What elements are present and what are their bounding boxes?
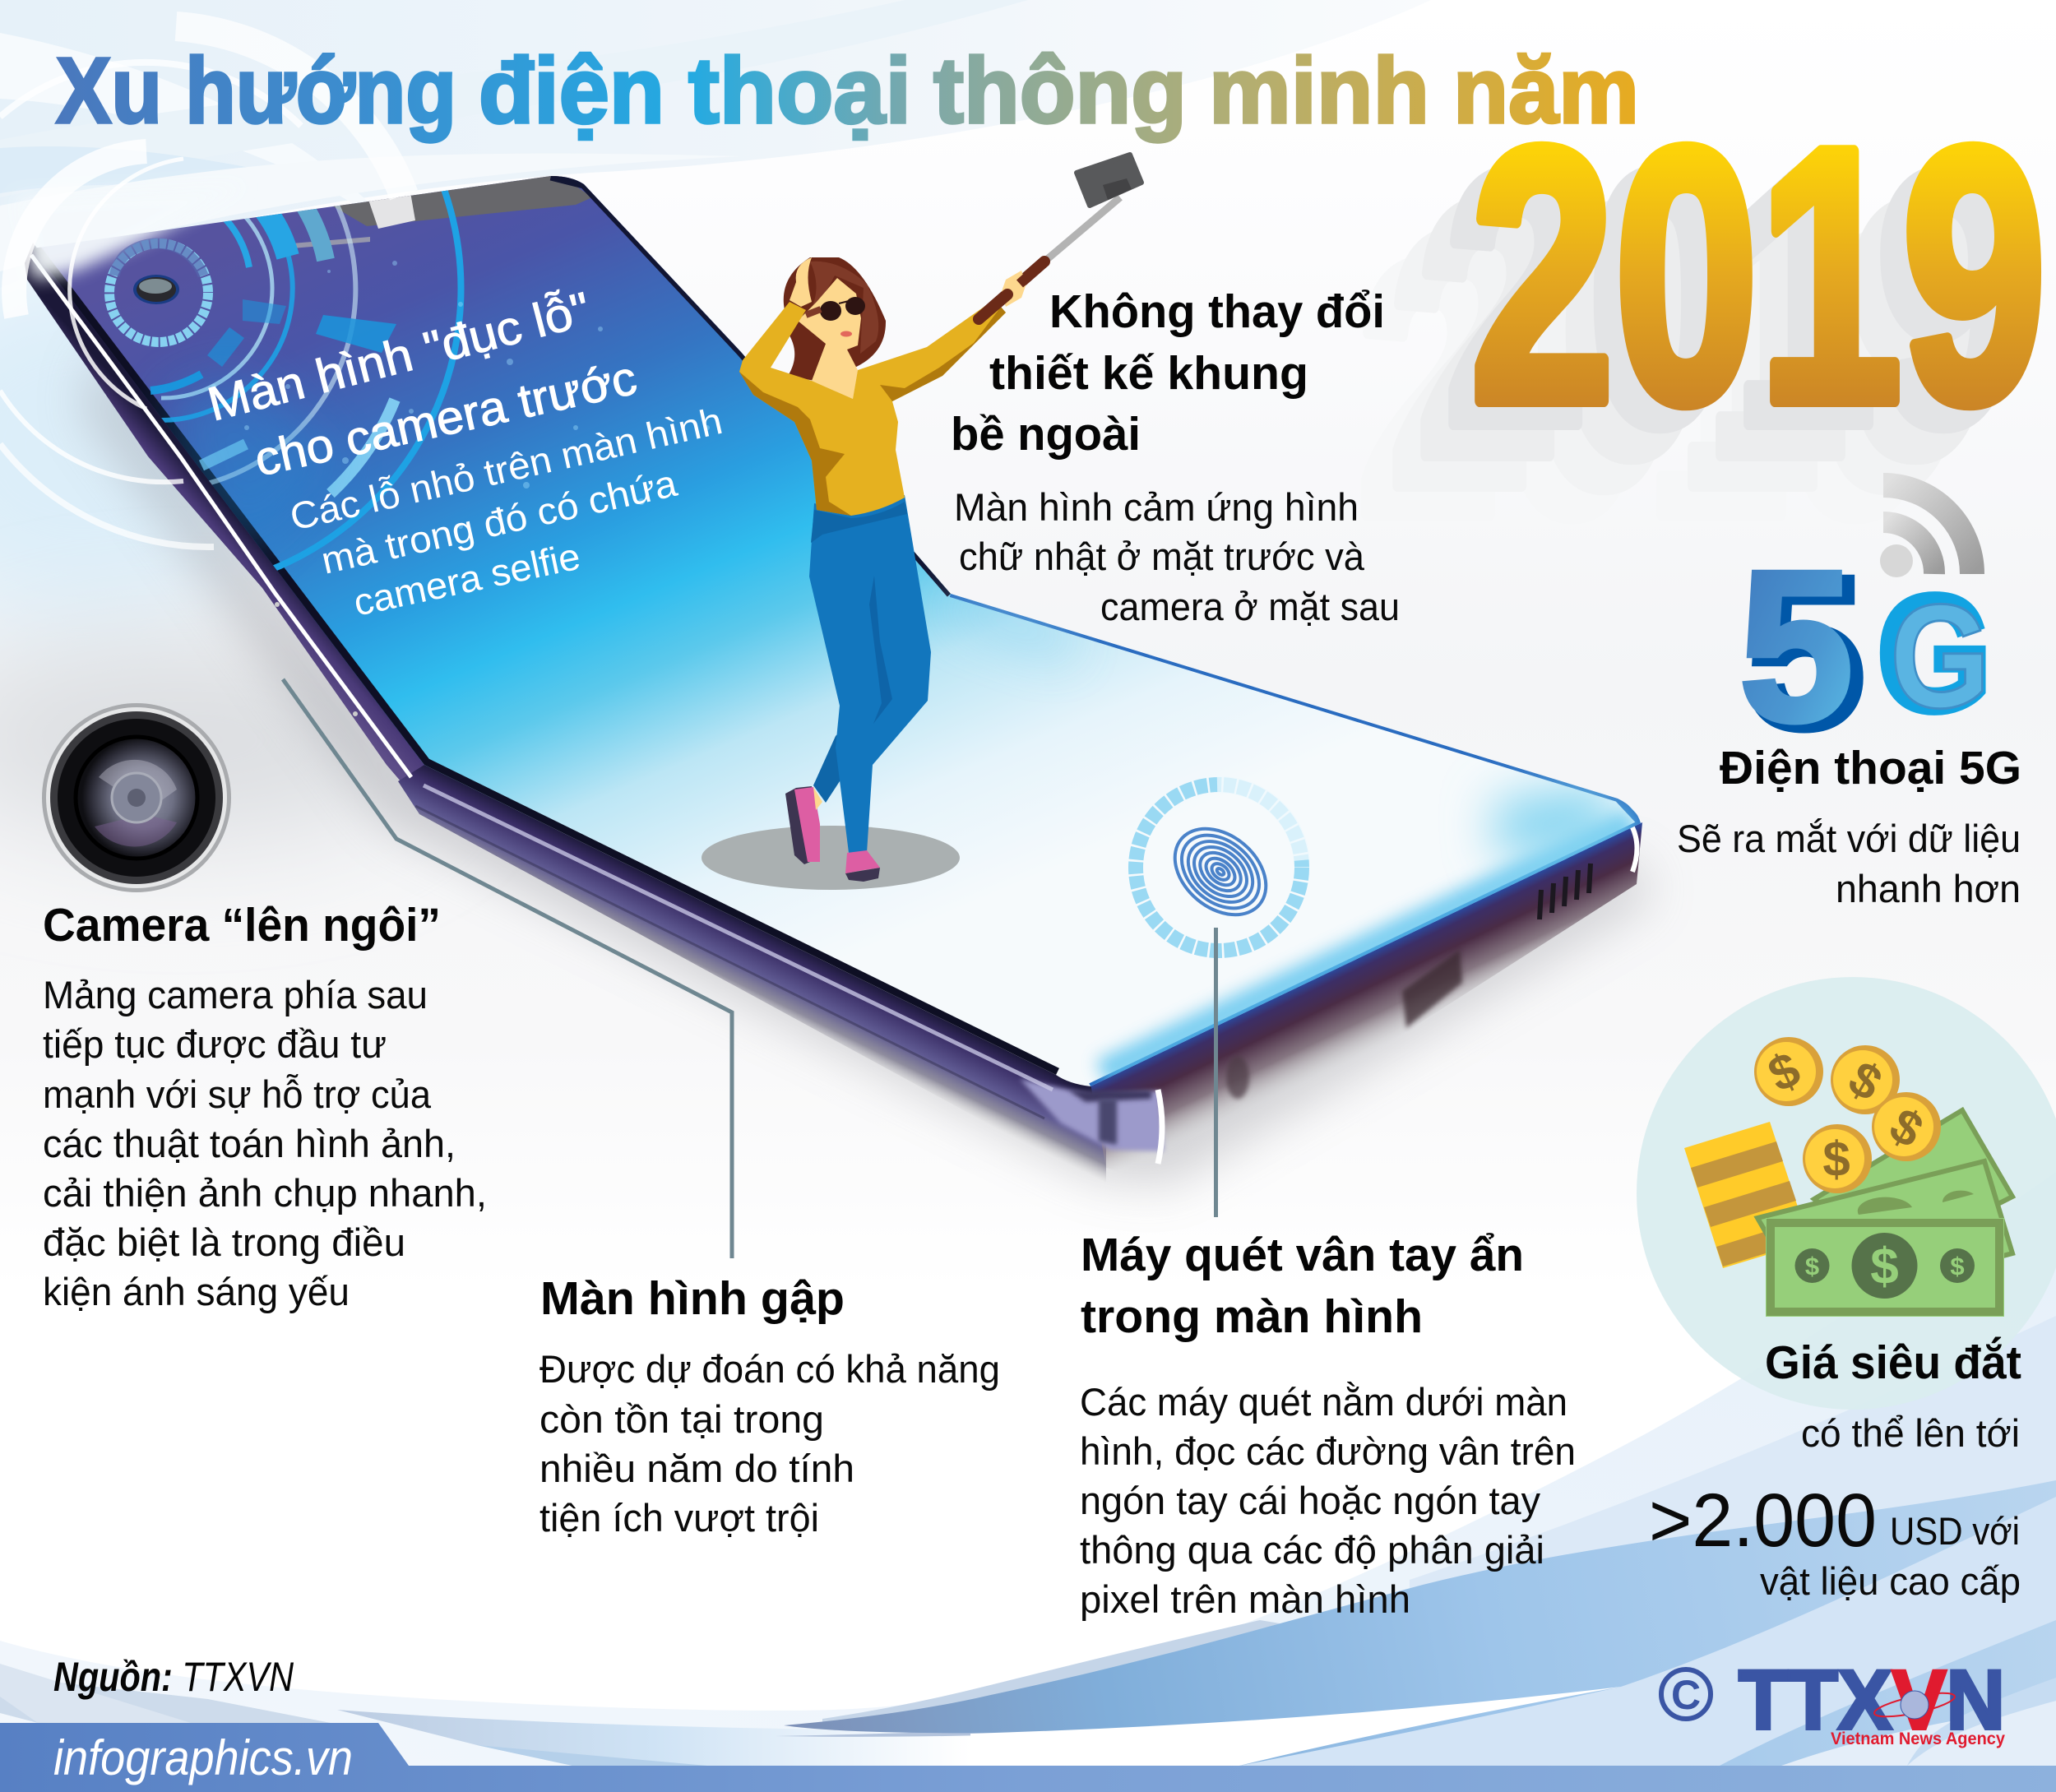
icon: front camera <box>109 243 208 342</box>
text: in-display fingerprint: thông qua các độ phân giải <box>1080 1528 1544 1572</box>
footer band <box>0 1723 2056 1792</box>
coins: $ <box>1881 1097 1932 1159</box>
logo: TTXVN: Vietnam News Agency <box>1831 1729 2005 1748</box>
text on screen: punch-hole display: cho camera trước <box>250 351 641 487</box>
logo: TTXVN: C <box>1671 1672 1701 1718</box>
lips <box>840 331 852 337</box>
text: unchanged design: thiết kế khung <box>989 347 1308 400</box>
text: camera: mạnh với sự hỗ trợ của <box>43 1072 432 1116</box>
ground shadow <box>702 826 960 890</box>
text: 5G phones: Điện thoại 5G <box>1720 742 2021 794</box>
text: in-display fingerprint: trong màn hình <box>1081 1290 1423 1343</box>
text: unchanged design: bề ngoài <box>951 408 1141 461</box>
icon: fingerprint sensor <box>1136 785 1302 951</box>
icon: camera lens <box>42 703 231 892</box>
phone illustration <box>0 148 1686 1184</box>
coins <box>1754 1037 1941 1193</box>
thin ring <box>70 159 183 409</box>
phone shadow <box>82 345 1653 1184</box>
medium ring <box>0 63 301 126</box>
phone body <box>25 243 1642 1184</box>
icon: 5G: G <box>1878 563 1990 743</box>
front bill: $ <box>1950 1252 1965 1280</box>
front bill: $ <box>1870 1239 1899 1295</box>
fog over phone corner <box>16 185 247 280</box>
text on screen: punch-hole display: Màn hình "đục lỗ" <box>202 282 595 432</box>
title: thoại <box>688 39 911 142</box>
text: in-display fingerprint: Máy quét vân tay ẩn <box>1081 1229 1524 1281</box>
back bills <box>1814 1110 2012 1258</box>
text: very expensive price: có thể lên tới <box>1801 1411 2020 1455</box>
coins: $ <box>1760 1041 1808 1103</box>
title: Xu hướng <box>56 39 456 142</box>
icon: 5G: 5 <box>1739 526 1854 766</box>
text on screen: punch-hole display: mà trong đó có chứa <box>317 461 681 582</box>
text: in-display fingerprint <box>1080 1229 1576 1621</box>
phone screen <box>36 176 1641 1086</box>
text: in-display fingerprint: pixel trên màn hình <box>1080 1577 1410 1621</box>
text: camera: đặc biệt là trong điều <box>43 1220 405 1264</box>
text: very expensive price: Giá siêu đắt <box>1765 1336 2021 1389</box>
face and neck <box>798 278 861 399</box>
panel: price circle <box>1637 977 2056 1410</box>
icon: money <box>1684 1037 2012 1317</box>
sweater <box>739 302 1006 516</box>
icon: 5G: G <box>1890 574 1990 739</box>
text on screen: punch-hole display: camera selfie <box>350 535 584 624</box>
text: very expensive price: USD với <box>1890 1509 2020 1553</box>
text: camera: kiện ánh sáng yếu <box>43 1270 350 1313</box>
hair <box>784 257 886 387</box>
text: very expensive price: >2.000 <box>1649 1479 1877 1563</box>
text: unchanged design <box>951 285 1400 628</box>
text: foldable screen: Được dự đoán có khả năng <box>539 1347 1000 1391</box>
icon: 5G <box>1739 526 1990 773</box>
text: camera: tiếp tục được đầu tư <box>43 1022 387 1066</box>
text: 5G phones: Sẽ ra mắt với dữ liệu <box>1677 817 2021 860</box>
gold bars <box>1684 1122 1809 1268</box>
text: unchanged design: Màn hình cảm ứng hình <box>954 485 1359 529</box>
raised hands <box>790 257 812 307</box>
thick ring top <box>176 26 404 195</box>
front bill: $ <box>1805 1252 1819 1280</box>
white target rings around front camera <box>0 26 404 547</box>
text: in-display fingerprint: hình, đọc các đường vân trên <box>1080 1429 1576 1473</box>
text: camera: Mảng camera phía sau <box>43 973 428 1016</box>
illustration: woman taking selfie <box>702 155 1141 890</box>
title <box>56 39 1639 142</box>
screen specks <box>211 261 710 529</box>
connector lines <box>283 679 1216 1258</box>
text: foldable screen: còn tồn tại trong <box>539 1397 824 1441</box>
jeans <box>809 495 931 853</box>
title: minh <box>1209 39 1429 142</box>
camera target arcs <box>150 189 461 578</box>
coins: $ <box>1822 1132 1850 1187</box>
icon: wifi signal <box>1880 485 1972 577</box>
text: unchanged design: Không thay đổi <box>1049 285 1385 338</box>
source: Nguồn: TTXVN <box>53 1654 294 1700</box>
text on screen: punch-hole display <box>202 282 726 624</box>
title: năm <box>1453 39 1639 142</box>
text: in-display fingerprint: Các máy quét nằm dưới màn <box>1080 1380 1567 1424</box>
front bill <box>1766 1218 2004 1317</box>
text: camera: cải thiện ảnh chụp nhanh, <box>43 1171 487 1215</box>
thick ring left <box>14 151 146 317</box>
text: foldable screen <box>539 1272 1000 1540</box>
icon: 5G: 5 <box>1745 532 1865 773</box>
text: in-display fingerprint: ngón tay cái hoặc ngón tay <box>1080 1479 1540 1522</box>
shoes <box>785 786 880 882</box>
bottom waves <box>0 1172 2056 1766</box>
text: unchanged design: chữ nhật ở mặt trước và <box>959 535 1365 578</box>
title: điện <box>479 39 664 142</box>
text: very expensive price <box>1649 1336 2021 1603</box>
text: 5G phones <box>1677 742 2021 910</box>
text: camera: Camera “lên ngôi” <box>43 899 441 952</box>
text: foldable screen: nhiều năm do tính <box>539 1447 854 1490</box>
title: thông <box>933 39 1187 142</box>
text: 5G phones: nhanh hơn <box>1836 867 2021 910</box>
text: foldable screen: tiện ích vượt trội <box>539 1496 819 1540</box>
text: camera <box>43 899 487 1313</box>
text: unchanged design: camera ở mặt sau <box>1100 585 1400 628</box>
coins: $ <box>1840 1050 1891 1112</box>
text: camera: các thuật toán hình ảnh, <box>43 1122 456 1165</box>
logo: TTXVN: TTXVN <box>1739 1653 2005 1747</box>
text: foldable screen: Màn hình gập <box>540 1272 845 1325</box>
website: infographics.vn <box>53 1730 353 1785</box>
text on screen: punch-hole display: Các lỗ nhỏ trên màn hình <box>286 399 726 539</box>
text: very expensive price: vật liệu cao cấp <box>1760 1559 2021 1603</box>
sunglasses <box>806 297 865 321</box>
selfie stick <box>979 155 1141 319</box>
